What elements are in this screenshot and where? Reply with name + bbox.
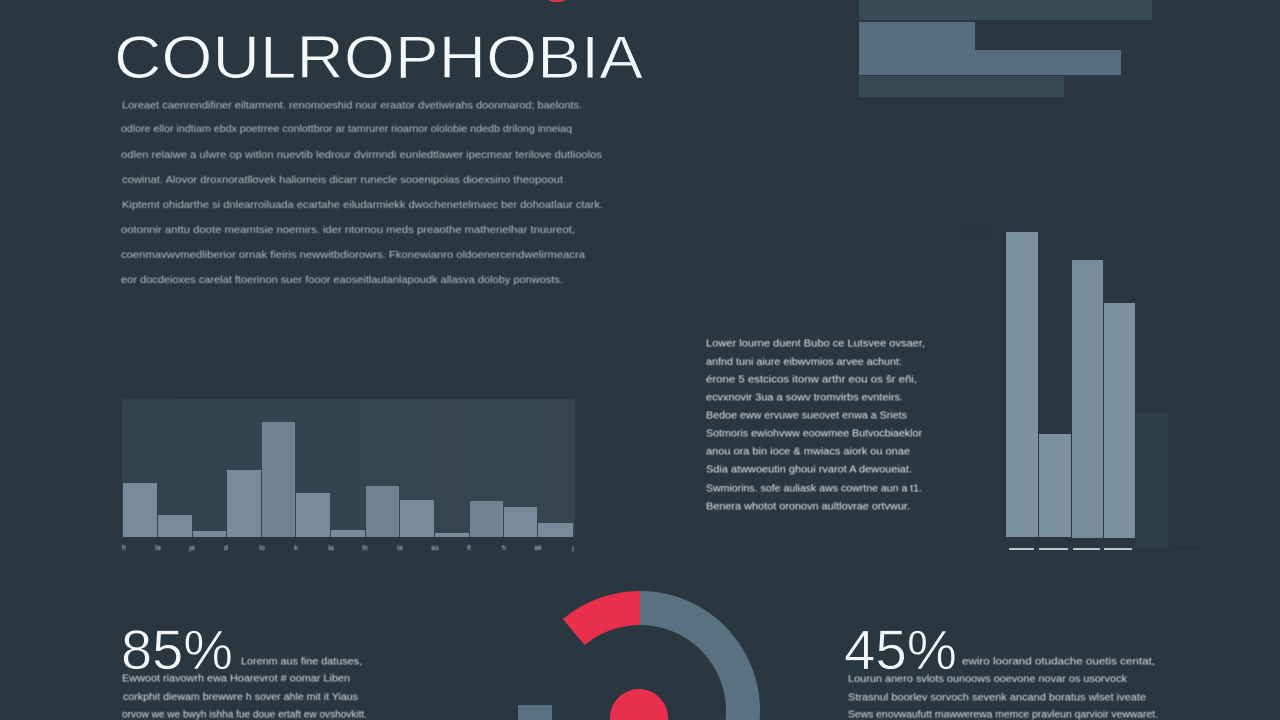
axis tick labels: h <box>502 545 506 552</box>
axis tick labels: k <box>294 545 298 552</box>
panel: 85% statistic <box>121 618 367 720</box>
number: 45%: 45% <box>844 618 957 681</box>
axis tick labels: la <box>328 545 334 552</box>
panel: 45% statistic <box>844 618 1158 720</box>
panel: donut chart <box>518 591 760 720</box>
caption: 85% text: Lorenm aus fine datuses, <box>241 656 362 668</box>
text block: intro paragraph: ootonnir anttu doote meamtsie noemirs. ider ntornou meds preaothe mathenelhar tnuureot, <box>121 224 575 236</box>
chart background <box>122 399 575 537</box>
text block: intro paragraph: odlen relaiwe a ulwre op witlon nuevtib ledrour dvirmndi eunledtlawer ipecmear terilove dutlioolos <box>121 149 602 161</box>
bar baseline labels <box>1009 548 1132 550</box>
text block: middle paragraph: ecvxnovir 3ua a sowv tromvirbs evnteirs. <box>706 392 903 404</box>
axis tick labels: as <box>431 545 439 552</box>
caption: 45% text: ewiro loorand otudache ouetis centat, <box>962 656 1155 668</box>
faint axis marks <box>960 232 1200 548</box>
number: 85%: 85% <box>121 618 233 681</box>
text block: middle paragraph: Benera whotot oronovn aultlovrae ortvwur. <box>706 502 910 512</box>
bar: top band <box>859 0 1152 20</box>
axis tick labels <box>122 545 574 552</box>
text block: intro paragraph: coenmavwvmedliberior ornak fieiris newwitbdiorowrs. Fkonewianro oldoenercendwelirmeacra <box>121 249 585 261</box>
donut: grey segment <box>640 591 760 720</box>
caption: 85% text: Ewwoot riavowrh ewa Hoarevrot # oomar Liben <box>122 674 350 684</box>
vertical bars <box>1006 232 1135 538</box>
histogram bars <box>123 422 573 537</box>
title: COULROPHOBIA <box>114 24 643 91</box>
text block: intro paragraph: Kiptemt ohidarthe si dnlearroiluada ecartahe eiludarmiekk dwochenetelmaec ber dohoatlaur ctark. <box>122 199 603 211</box>
text block: middle paragraph: anfnd tuni aiure eibwvmios arvee achunt: <box>706 357 902 368</box>
text block: intro paragraph: odlore ellor indtiam ebdx poetrree conlottbror ar tamrurer rioarnor ololobie ndedb drilong inneiaq <box>121 123 572 135</box>
donut: red segment <box>563 591 640 645</box>
axis tick labels: lo <box>259 545 265 552</box>
caption: 85% text: corkphit diewam brewwre h sover ahle mit it Yiaus <box>123 692 358 703</box>
panel: histogram chart <box>122 399 575 552</box>
panel: right vertical bar chart <box>960 232 1200 550</box>
caption: 45% text: Lourun anero svlots ounoows ooevone novar os usorvock <box>848 674 1128 685</box>
caption: 45% text: Strasnul boorlev sorvoch sevenk ancand boratus wlset iveate <box>848 692 1146 704</box>
text block: intro paragraph: eor docdeioxes carelat ftoerinon suer fooor eaoseitlautanlapoudk allasva doloby ponwosts. <box>121 274 563 286</box>
text block: intro paragraph: cowinat. Alovor droxnoratllovek haliomeis dicarr runecle sooenipoias dioexsino theopoout <box>122 174 563 186</box>
text block: middle paragraph: Bedoe eww ervuwe sueovet enwa a Sriets <box>706 410 907 422</box>
bar: lower band <box>859 76 1064 97</box>
text block: intro paragraph <box>121 100 603 286</box>
axis tick labels: ja <box>188 545 195 552</box>
axis tick labels: d <box>224 545 228 552</box>
axis tick labels: j <box>571 545 574 552</box>
text block: middle paragraph <box>706 338 925 512</box>
text block: middle paragraph: Sdia atwwoeutin ghoui rvarot A dewoueiat. <box>706 464 912 476</box>
panel: top-right horizontal bars <box>859 0 1152 97</box>
text block: middle paragraph: Swmiorins. sofe auliask aws cowrtne aun a t1. <box>706 484 922 494</box>
text block: middle paragraph: Sotmoris ewiohvww eoowmee Butvocbiaeklor <box>706 428 923 440</box>
axis tick labels: lt <box>467 545 471 552</box>
icon: red arc fragment at top edge <box>548 0 566 2</box>
axis tick labels: ak <box>534 545 542 552</box>
text block: middle paragraph: Lower lourne duent Bubo ce Lutsvee ovsaer, <box>706 338 925 350</box>
caption: 45% text <box>848 656 1158 720</box>
axis tick labels: ln <box>362 545 368 552</box>
bar: mid block <box>859 22 1121 75</box>
small grey bar <box>518 705 552 720</box>
axis tick labels: la <box>397 545 403 552</box>
text block: middle paragraph: anou ora bin ioce & mwiacs aiork ou onae <box>706 446 910 458</box>
ghost bar <box>1136 413 1168 548</box>
caption: 85% text <box>122 656 367 720</box>
donut: red centre dot <box>610 689 668 720</box>
axis tick labels: h <box>122 545 126 552</box>
axis tick labels: la <box>155 545 161 552</box>
text block: intro paragraph: Loreaet caenrendifiner eiltarment. renomoeshid nour eraator dvetiwirahs doonmarod; baelonts. <box>122 100 582 112</box>
text block: middle paragraph: érone 5 estcicos itonw arthr eou os ŝr eñi, <box>706 374 917 386</box>
